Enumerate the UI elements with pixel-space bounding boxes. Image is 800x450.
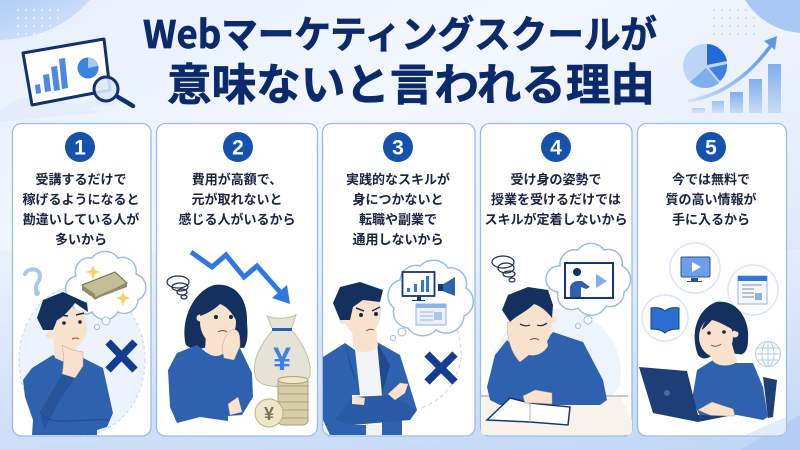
number badge 1	[65, 132, 95, 162]
number badge 1: 1	[74, 136, 86, 160]
illustration: thinking man with money thought	[19, 251, 146, 435]
number badge 2: 2	[232, 136, 244, 160]
text: reason 5	[665, 172, 757, 227]
text: reason 2: 元が取れないと	[191, 192, 283, 207]
icon: book bubble	[642, 295, 688, 341]
number badge 5	[696, 132, 726, 162]
title: 意味ないと言われる理由	[167, 49, 655, 113]
icon: cross mark	[427, 354, 455, 382]
text: reason 4	[484, 172, 628, 227]
panel: reason 4	[480, 124, 632, 436]
text: reason 4: スキルが定着しないから	[484, 212, 628, 227]
text: reason 1	[22, 172, 140, 247]
text: reason 2: 費用が高額で、	[192, 172, 282, 187]
panel: reason 2	[156, 124, 318, 436]
number badge 4	[541, 132, 571, 162]
icon: yen money bag and coins: ¥	[264, 404, 274, 424]
text: reason 1: 勘違いしている人が	[23, 212, 139, 227]
text: reason 4: 授業を受けるだけでは	[491, 192, 621, 207]
thought cloud: monitor, megaphone, window	[388, 260, 473, 340]
text: reason 3: 実践的なスキルが	[346, 172, 450, 187]
icon: yen money bag and coins	[254, 315, 310, 427]
text: reason 2	[178, 172, 296, 227]
icon: confused swirl	[167, 276, 189, 299]
text: reason 3: 通用しないから	[352, 232, 444, 247]
text: reason 5: 手に入るから	[672, 212, 750, 227]
text: reason 3: 身につかないと	[352, 192, 444, 207]
illustration: man with arms crossed	[323, 282, 461, 435]
number badge 4: 4	[550, 136, 562, 160]
decoration: pie chart and growth bars	[683, 36, 781, 113]
panel: reason 1	[12, 124, 151, 436]
illustration: woman with laptop	[639, 302, 777, 422]
icon: falling arrow	[191, 252, 290, 304]
text: reason 5: 質の高い情報が	[665, 192, 757, 207]
illustration: worried woman	[168, 285, 253, 423]
text: reason 2: 感じる人がいるから	[178, 212, 296, 227]
number badge 2	[223, 132, 253, 162]
icon: video monitor bubble	[670, 243, 720, 293]
text: reason 4: 受け身の姿勢で	[510, 172, 602, 187]
number badge 5: 5	[705, 136, 717, 160]
panel: reason 3	[322, 124, 475, 436]
number badge 3	[383, 132, 413, 162]
text: reason 1: 多いから	[55, 232, 107, 247]
number badge 3: 3	[392, 136, 404, 160]
icon: globe	[756, 342, 780, 366]
icon: swirl	[492, 256, 515, 282]
text: reason 5: 今では無料で	[672, 172, 750, 187]
illustration: sleepy man at desk	[481, 287, 632, 435]
icon: yen money bag and coins: ¥	[273, 341, 291, 377]
text: reason 3: 転職や副業で	[359, 212, 437, 227]
thought cloud: video lesson	[546, 243, 631, 328]
icon: web page bubble	[728, 265, 778, 315]
title	[143, 4, 657, 113]
text: reason 3	[346, 172, 450, 247]
decoration: laptop with magnifier	[20, 39, 133, 116]
text: reason 1: 受講するだけで	[35, 172, 127, 187]
title: Webマーケティングスクールが	[143, 4, 657, 59]
text: reason 1: 稼げるようになると	[22, 192, 140, 207]
panel: reason 5	[638, 124, 786, 436]
